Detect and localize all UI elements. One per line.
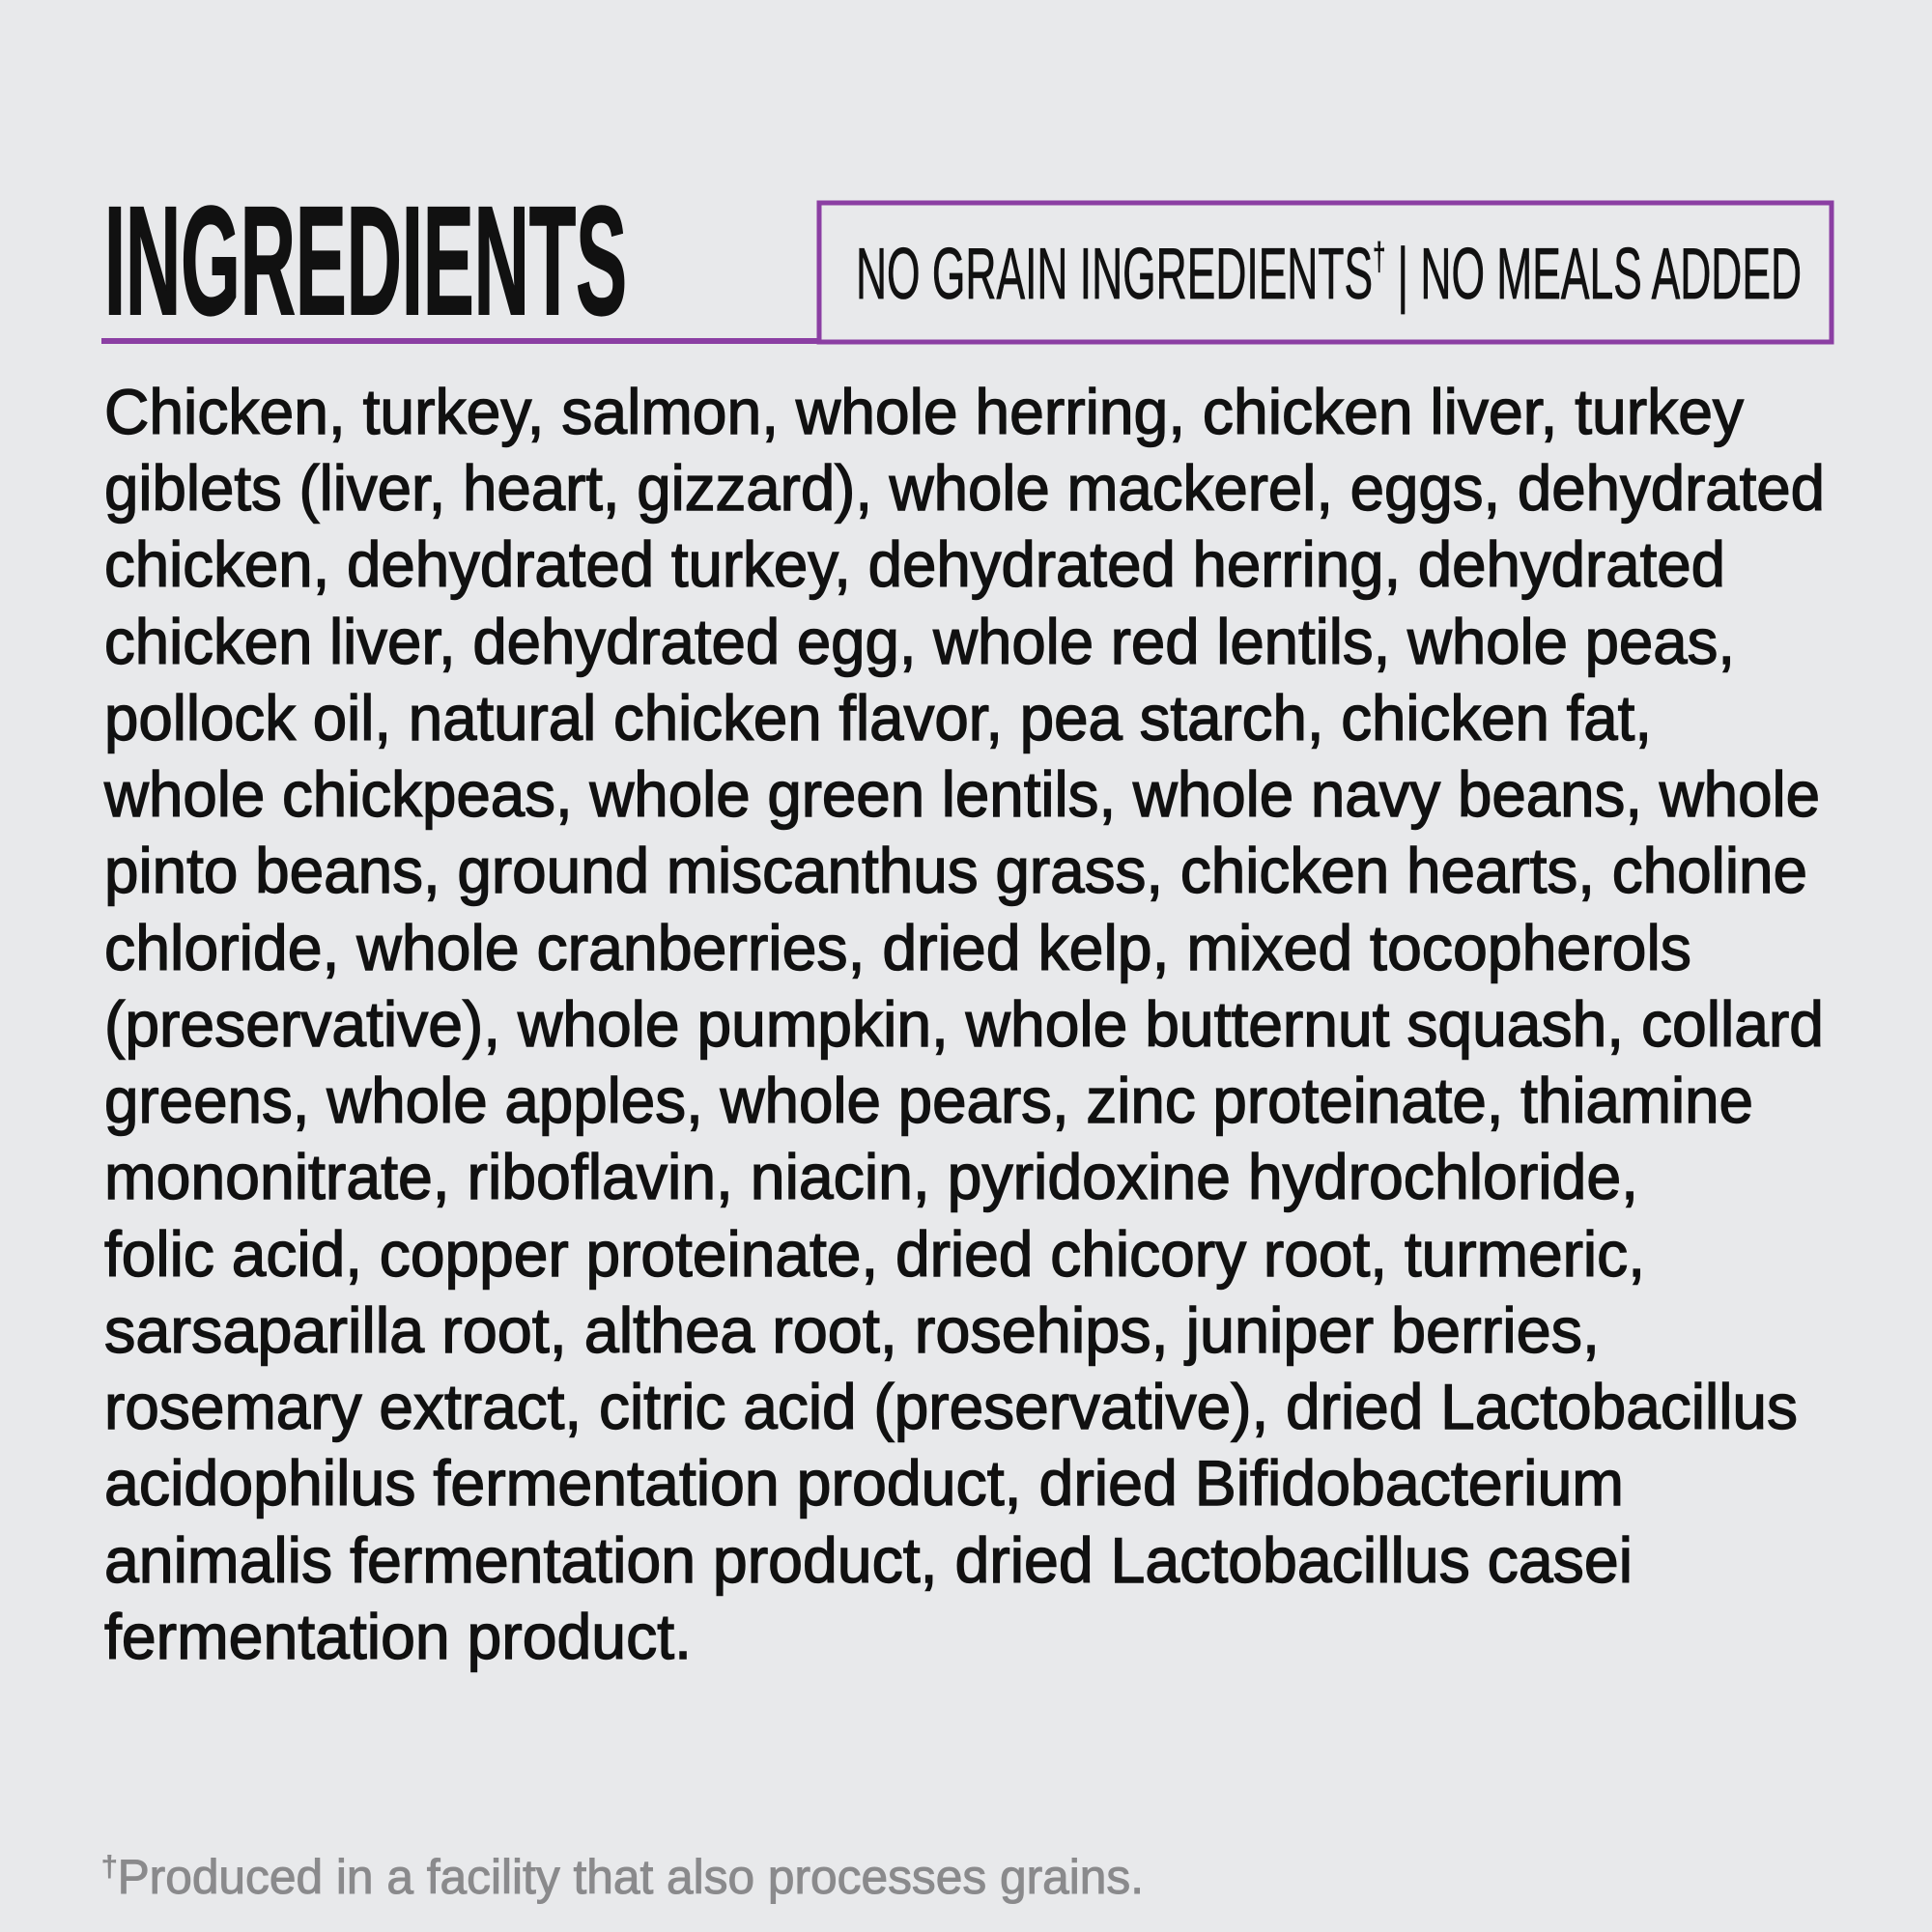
ingredients text block: acidophilus fermentation product, dried Bifidobacterium: [104, 1447, 1624, 1519]
ingredients text block: whole chickpeas, whole green lentils, whole navy beans, whole: [103, 758, 1820, 830]
purple underline: [101, 338, 821, 344]
badge box: no grain / no meals: [819, 203, 1832, 342]
ingredients text block: greens, whole apples, whole pears, zinc proteinate, thiamine: [104, 1065, 1753, 1136]
ingredients text block: giblets (liver, heart, gizzard), whole mackerel, eggs, dehydrated: [104, 452, 1825, 524]
ingredients text block: rosemary extract, citric acid (preservative), dried Lactobacillus: [104, 1371, 1798, 1442]
ingredients text block: sarsaparilla root, althea root, rosehips, juniper berries,: [104, 1294, 1600, 1366]
ingredients text block: animalis fermentation product, dried Lactobacillus casei: [104, 1524, 1633, 1596]
ingredients text block: Chicken, turkey, salmon, whole herring, chicken liver, turkey: [104, 376, 1744, 447]
ingredients text block: chloride, whole cranberries, dried kelp, mixed tocopherols: [104, 912, 1691, 983]
ingredients text block: pinto beans, ground miscanthus grass, chicken hearts, choline: [104, 835, 1807, 906]
badge box: no grain / no meals: †: [1373, 236, 1385, 278]
footnote: †: [101, 1851, 118, 1883]
ingredients text block: fermentation product.: [104, 1601, 692, 1672]
text: INGREDIENTS: [104, 174, 627, 347]
ingredients text block: (preservative), whole pumpkin, whole butternut squash, collard: [104, 988, 1824, 1060]
ingredients text block: [103, 376, 1825, 1672]
badge box: no grain / no meals: NO GRAIN INGREDIENTS: [856, 233, 1729, 314]
ingredients text block: chicken, dehydrated turkey, dehydrated herring, dehydrated: [104, 528, 1725, 600]
ingredients text block: mononitrate, riboflavin, niacin, pyridoxine hydrochloride,: [104, 1141, 1638, 1212]
footnote: Produced in a facility that also processes grains.: [118, 1850, 1144, 1904]
ingredients text block: pollock oil, natural chicken flavor, pea starch, chicken fat,: [104, 682, 1652, 753]
ingredients text block: chicken liver, dehydrated egg, whole red lentils, whole peas,: [104, 606, 1735, 677]
ingredients text block: folic acid, copper proteinate, dried chicory root, turmeric,: [104, 1218, 1645, 1290]
